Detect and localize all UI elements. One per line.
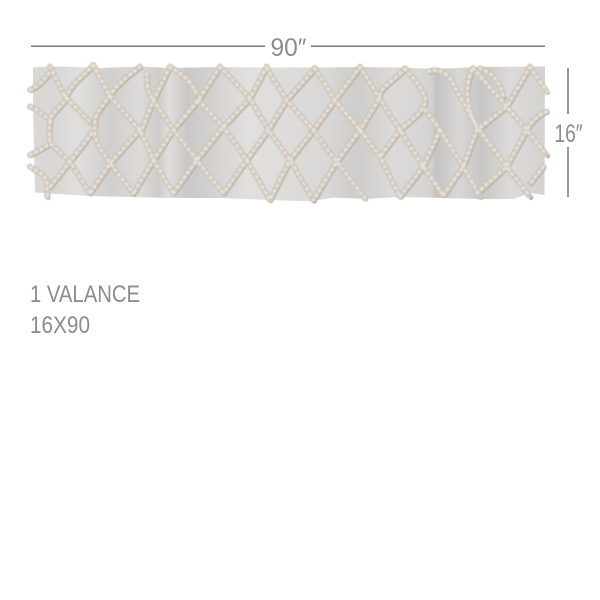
height dimension line: 16 inches: 16″ [554, 120, 583, 148]
lattice chenille pattern, left half [30, 65, 316, 201]
height dimension line: 16 inches [554, 68, 583, 197]
lattice chenille pattern, right half [313, 67, 548, 201]
product description text: 1 VALANCE [30, 281, 140, 308]
product description text: 16X90 [30, 312, 90, 339]
width dimension line: 90 inches: 90″ [270, 34, 307, 62]
product description text [30, 281, 140, 339]
valance curtain [30, 65, 548, 201]
fabric panel with folds [33, 66, 545, 201]
